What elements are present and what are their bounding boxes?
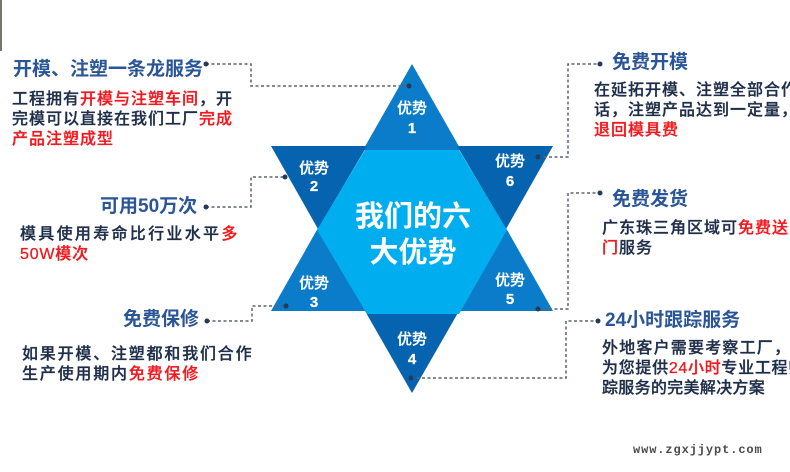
body text: 生产使用期内免费保修 bbox=[22, 366, 200, 383]
point 2 bbox=[271, 146, 367, 229]
label 4: 4 bbox=[408, 351, 417, 368]
heading: 免费保修 bbox=[123, 309, 199, 330]
body text: 踪服务的完美解决方案 bbox=[602, 380, 765, 397]
heading: 24小时跟踪服务 bbox=[605, 310, 740, 331]
center title: 大优势 bbox=[369, 236, 457, 269]
connector 2 bbox=[204, 174, 288, 210]
panel: advantage 6 bbox=[594, 52, 790, 139]
heading: 免费发货 bbox=[612, 189, 688, 210]
heading: 可用50万次 bbox=[100, 196, 197, 217]
connector 3 bbox=[204, 304, 288, 324]
point 4 bbox=[365, 311, 459, 393]
body text: 完模可以直接在我们工厂完成 bbox=[12, 111, 233, 128]
label 2 bbox=[299, 160, 329, 195]
body text: 门服务 bbox=[602, 240, 653, 257]
body text: 如果开模、注塑都和我们合作 bbox=[22, 346, 253, 363]
heading: 开模、注塑一条龙服务 bbox=[13, 59, 203, 80]
center title: 我们的六 bbox=[355, 200, 471, 233]
label 5: 优势 bbox=[495, 272, 525, 289]
label 4: 优势 bbox=[397, 331, 427, 348]
body text: 50W模次 bbox=[20, 246, 89, 263]
star diagram bbox=[271, 64, 553, 393]
watermark url: www.zgxjjypt.com bbox=[633, 443, 763, 457]
body text bbox=[602, 339, 790, 397]
connector 1 bbox=[204, 62, 412, 88]
central hexagon bbox=[317, 150, 507, 314]
label 3 bbox=[299, 275, 329, 311]
body text: 模具使用寿命比行业水平多 bbox=[20, 226, 240, 243]
body text: 外地客户需要考察工厂， bbox=[602, 340, 790, 357]
label 6 bbox=[495, 153, 525, 190]
label 1: 优势 bbox=[397, 100, 427, 117]
panel: advantage 1 bbox=[12, 58, 233, 148]
panel: advantage 4 bbox=[602, 310, 790, 397]
body text bbox=[12, 90, 233, 148]
body text: 退回模具费 bbox=[594, 122, 679, 139]
label 5 bbox=[495, 272, 525, 308]
label 4 bbox=[397, 331, 427, 368]
label 2: 优势 bbox=[299, 160, 329, 177]
connector 4 bbox=[408, 318, 600, 380]
label 6: 优势 bbox=[495, 153, 525, 170]
point 5 bbox=[457, 228, 553, 311]
label 3: 3 bbox=[310, 294, 318, 311]
panel: advantage 5 bbox=[602, 188, 789, 257]
label 1: 1 bbox=[408, 120, 416, 137]
point 3 bbox=[271, 228, 367, 311]
body text bbox=[20, 224, 240, 263]
label 1 bbox=[397, 100, 427, 137]
center title bbox=[355, 200, 471, 269]
point 1 bbox=[363, 64, 461, 150]
label 2: 2 bbox=[310, 178, 318, 195]
label 6: 6 bbox=[506, 173, 514, 190]
label 3: 优势 bbox=[299, 275, 329, 292]
label 5: 5 bbox=[506, 291, 514, 308]
heading: 免费开模 bbox=[612, 52, 688, 73]
corner bar bbox=[0, 0, 2, 51]
panel: advantage 2 bbox=[20, 196, 240, 263]
connector 5 bbox=[536, 190, 602, 312]
body text bbox=[594, 81, 790, 139]
point 6 bbox=[457, 146, 553, 229]
body text: 工程拥有开模与注塑车间，开 bbox=[12, 91, 233, 108]
body text bbox=[22, 345, 253, 383]
panel: advantage 3 bbox=[22, 308, 253, 383]
body text bbox=[602, 219, 789, 257]
connector 6 bbox=[536, 62, 602, 160]
body text: 广东珠三角区域可免费送 bbox=[602, 220, 789, 237]
body text: 产品注塑成型 bbox=[12, 131, 114, 148]
